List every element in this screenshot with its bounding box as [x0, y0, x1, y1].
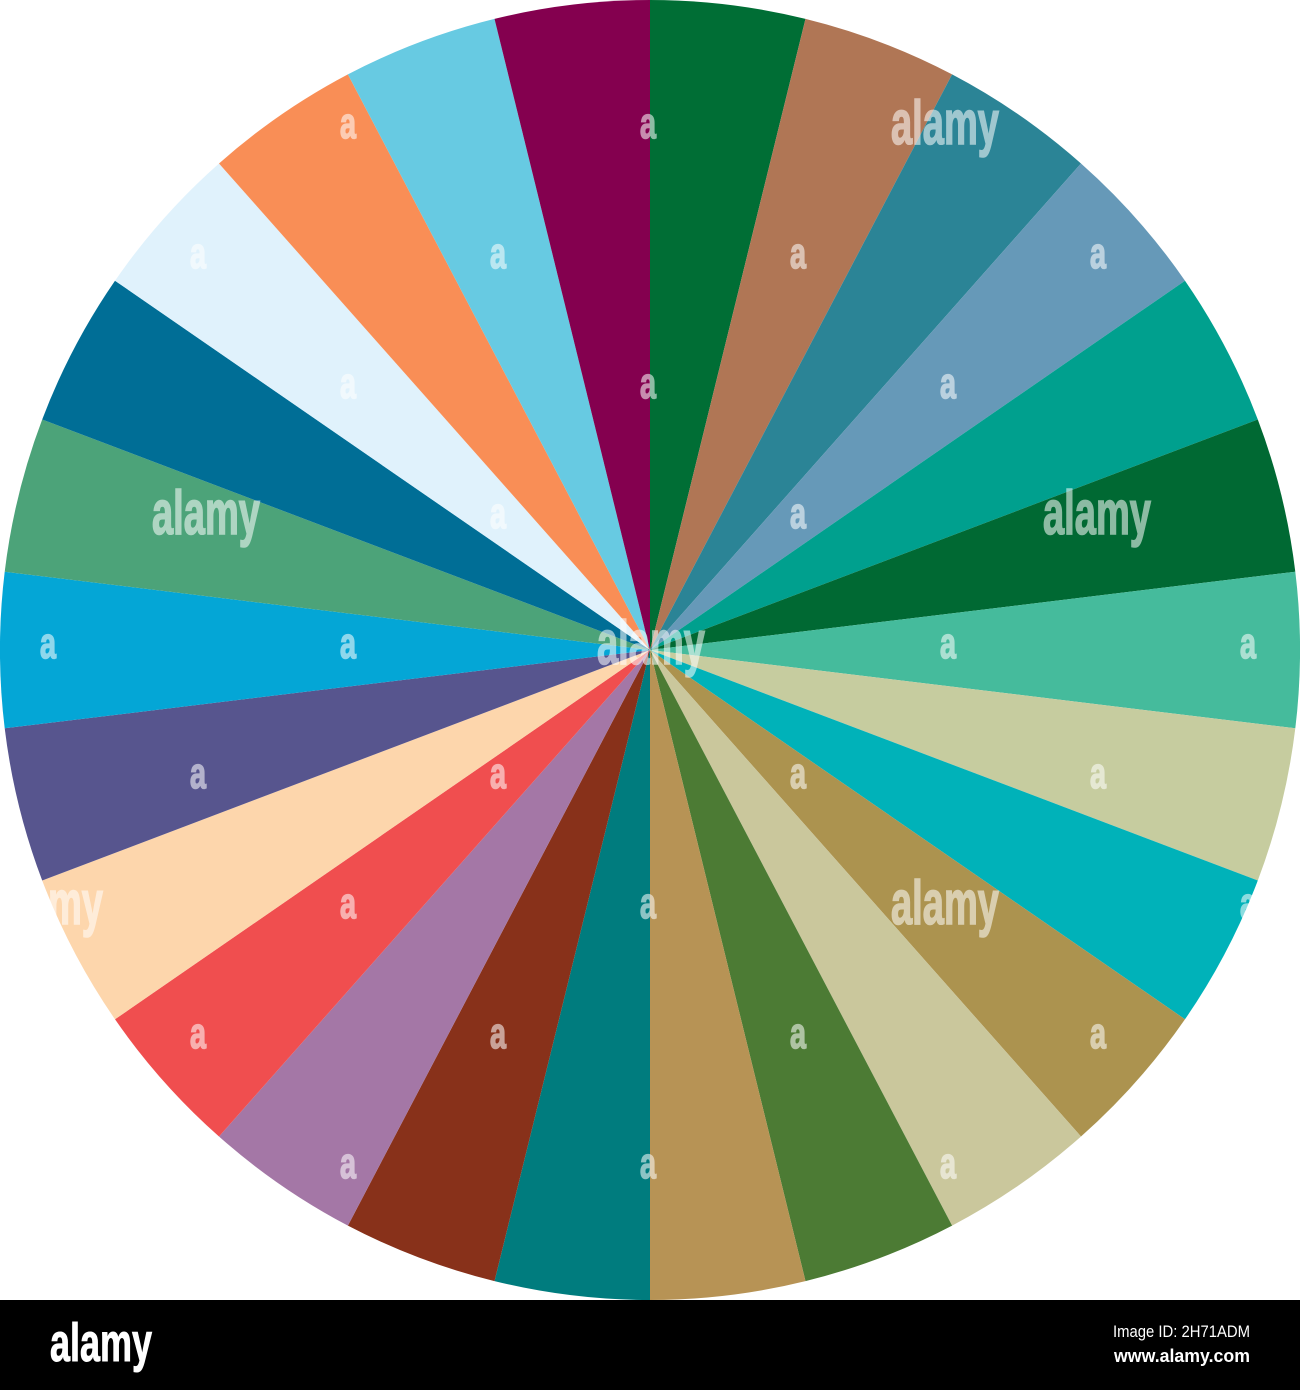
segment 5: sea green [650, 281, 1258, 650]
segment 6: forest green [650, 420, 1295, 650]
segment 17: coral red [115, 650, 650, 1136]
watermark: small repeated letter marks: a [190, 229, 206, 278]
segment 21: jade [5, 420, 650, 650]
segment 23: ice blue [115, 164, 650, 650]
watermark: small repeated letter marks: a [940, 1139, 956, 1188]
watermark: small repeated letter marks: a [1090, 749, 1106, 798]
segment 15: rust [348, 650, 650, 1281]
watermark: small repeated letter marks: a [1240, 619, 1256, 668]
segment 7: mint green [650, 572, 1300, 728]
segment 10: olive gold [650, 650, 1185, 1136]
watermark: small repeated letter marks: a [190, 749, 206, 798]
watermark: small repeated letter marks: a [340, 879, 356, 928]
watermark: full word marks [0, 89, 1151, 938]
segment 4: steel blue [650, 164, 1185, 650]
watermark: small repeated letter marks: a [490, 489, 506, 538]
segment 12: moss green [650, 650, 952, 1281]
watermark: small repeated letter marks: a [1090, 229, 1106, 278]
segment 9: turquoise [650, 650, 1258, 1019]
watermark: small repeated letter marks: a [490, 749, 506, 798]
watermark: small repeated letter marks: a [640, 99, 656, 148]
segment 24: orange [219, 74, 650, 650]
segment 11: khaki [650, 650, 1081, 1226]
watermark: small repeated letter marks: a [40, 619, 56, 668]
footer logo wordmark: alamy [50, 1313, 152, 1373]
watermark: small repeated letter marks: a [790, 749, 806, 798]
segment 1: dark green [650, 0, 806, 650]
segment 20: sky blue [0, 572, 650, 728]
segment 26: burgundy [494, 0, 650, 650]
watermark: small repeated letter marks: a [640, 879, 656, 928]
segment 19: indigo [5, 650, 650, 880]
segment 13: tan [650, 650, 806, 1300]
watermark: small repeated letter marks: a [490, 1009, 506, 1058]
watermark: small repeated letter marks: a [790, 229, 806, 278]
segment 22: ocean blue [42, 281, 650, 650]
image id: Image ID: 2H71ADM [1113, 1322, 1250, 1341]
watermark: full word marks: alamy [0, 869, 103, 938]
watermark: small repeated letter marks: a [340, 1139, 356, 1188]
website address: www.alamy.com [1113, 1346, 1250, 1366]
watermark: full word marks: alamy [891, 869, 999, 938]
watermark: small repeated letter marks: a [790, 1009, 806, 1058]
watermark: full word marks: alamy [1043, 479, 1151, 548]
watermark: small repeated letter marks: a [790, 489, 806, 538]
segment 14: deep teal [494, 650, 650, 1300]
watermark: small repeated letter marks: a [1240, 879, 1256, 928]
watermark: small repeated letter marks: a [640, 359, 656, 408]
watermark: small repeated letter marks [40, 99, 1256, 1188]
segment 25: light cyan [348, 19, 650, 650]
watermark: small repeated letter marks: a [340, 359, 356, 408]
watermark: full word marks: alamy [152, 479, 260, 548]
segment 8: pale sage [650, 650, 1295, 880]
watermark: small repeated letter marks: a [1090, 1009, 1106, 1058]
segment 18: peach [42, 650, 650, 1019]
watermark: small repeated letter marks: a [340, 99, 356, 148]
segment 16: mauve [219, 650, 650, 1226]
watermark: small repeated letter marks: a [640, 1139, 656, 1188]
watermark: small repeated letter marks: a [490, 229, 506, 278]
watermark: full word marks: alamy [891, 89, 999, 158]
segment 3: teal [650, 74, 1081, 650]
watermark: small repeated letter marks: a [340, 619, 356, 668]
watermark: full word marks: alamy [597, 609, 705, 678]
watermark: small repeated letter marks: a [940, 359, 956, 408]
segment 2: brown [650, 19, 952, 650]
watermark: small repeated letter marks: a [190, 1009, 206, 1058]
watermark: small repeated letter marks: a [940, 619, 956, 668]
footer bar [0, 1300, 1300, 1390]
